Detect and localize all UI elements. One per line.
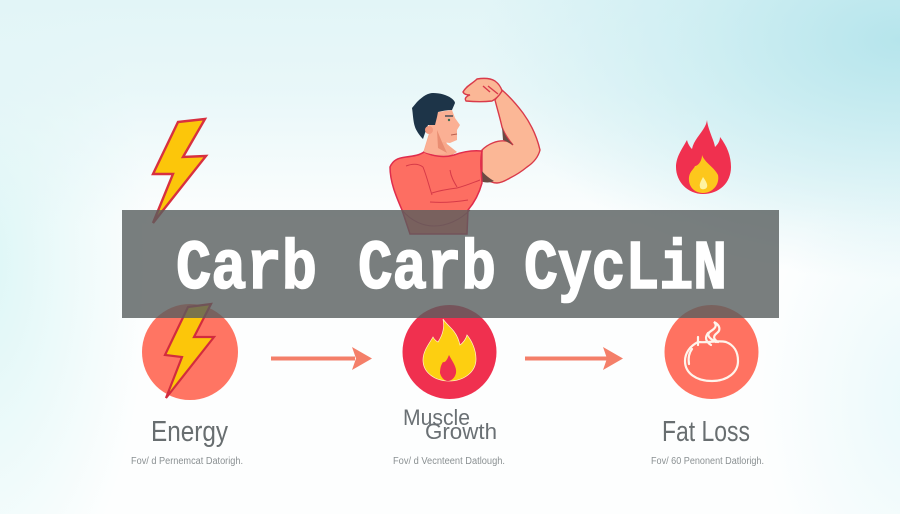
circle: fat loss xyxy=(664,305,758,399)
label: muscle growth: Muscle xyxy=(403,405,470,430)
caption: fat loss: Fov/ 60 Penonent Datlorigh. xyxy=(651,456,764,467)
label: fat loss: Fat Loss xyxy=(662,416,750,448)
icon: top flame xyxy=(676,120,731,194)
label: energy: Energy xyxy=(151,416,228,448)
arrow: energy to muscle growth xyxy=(271,347,372,370)
label: muscle growth: Growth xyxy=(425,419,497,444)
title xyxy=(176,231,727,310)
title: Carb xyxy=(358,231,496,310)
circle: muscle growth xyxy=(402,305,496,399)
title: CycLiN xyxy=(524,231,727,310)
title: Carb xyxy=(176,231,317,310)
icon: energy lightning bolt xyxy=(165,304,214,398)
caption: muscle growth: Fov/ d Vecnteent Datlough. xyxy=(393,456,505,467)
icon: muscle growth flame xyxy=(423,319,476,381)
banner xyxy=(122,210,779,318)
circle: energy xyxy=(142,304,238,400)
icon: fat loss outline xyxy=(685,322,738,381)
caption: energy: Fov/ d Pernemcat Datorigh. xyxy=(131,456,243,467)
icon: top lightning bolt xyxy=(153,119,206,223)
label: muscle growth xyxy=(403,405,497,444)
illustration: flexing man xyxy=(390,78,540,234)
arrow: muscle growth to fat loss xyxy=(525,347,623,370)
